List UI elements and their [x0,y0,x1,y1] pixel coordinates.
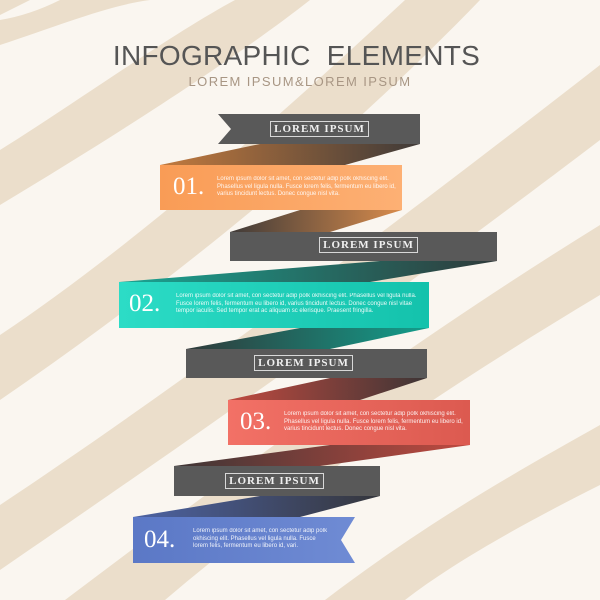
title: INFOGRAPHIC ELEMENTS [113,40,480,71]
label 4 [225,473,324,489]
subtitle: LOREM IPSUM&LOREM IPSUM [189,74,411,89]
label 3 [254,355,353,371]
text 02: Lorem ipsum dolor sit amet, con sectetur adip polk okhiscing elit. Phasellus vel ligula nulla. Fusce lorem felis, fermentum eu libero id, varius tincidunt lectus. Donec congue nisl vitae tempor iaculis. Sed tempor erat ac aliquam sc elerisque. Praesent fringilla. [176,293,416,314]
text 01: Lorem ipsum dolor sit amet, con sectetur adip polk okhiscing elit. Phasellus vel ligula nulla. Fusce lorem felis, fermentum eu libero id, varius tincidunt lectus. Donec congue nisl vita. [217,176,396,197]
text 04: Lorem ipsum dolor sit amet, con sectetur adip polk okhiscing elit. Phasellus vel ligula nulla. Fusce lorem felis, fermentum eu libero id, vari. [193,528,327,549]
gray bands [174,114,497,496]
number 01: 01. [173,173,204,200]
label 1: LOREM IPSUM [274,123,365,135]
label 2: LOREM IPSUM [323,239,414,251]
label 2 [319,237,418,253]
step 03 [240,408,463,435]
number 03: 03. [240,408,271,435]
number 04: 04. [144,526,175,553]
label 3: LOREM IPSUM [258,357,349,369]
colored panels [119,165,470,563]
step 02 [129,290,416,317]
step 01 [173,173,396,200]
label 4: LOREM IPSUM [229,475,320,487]
text 03: Lorem ipsum dolor sit amet, con sectetur adip polk okhiscing elit. Phasellus vel ligula nulla. Fusce lorem felis, fermentum eu libero id, varius tincidunt lectus. Donec congue nisl vita. [284,411,463,432]
label 1 [270,121,369,137]
number 02: 02. [129,290,160,317]
step 04 [144,526,328,553]
connectors [119,144,497,517]
